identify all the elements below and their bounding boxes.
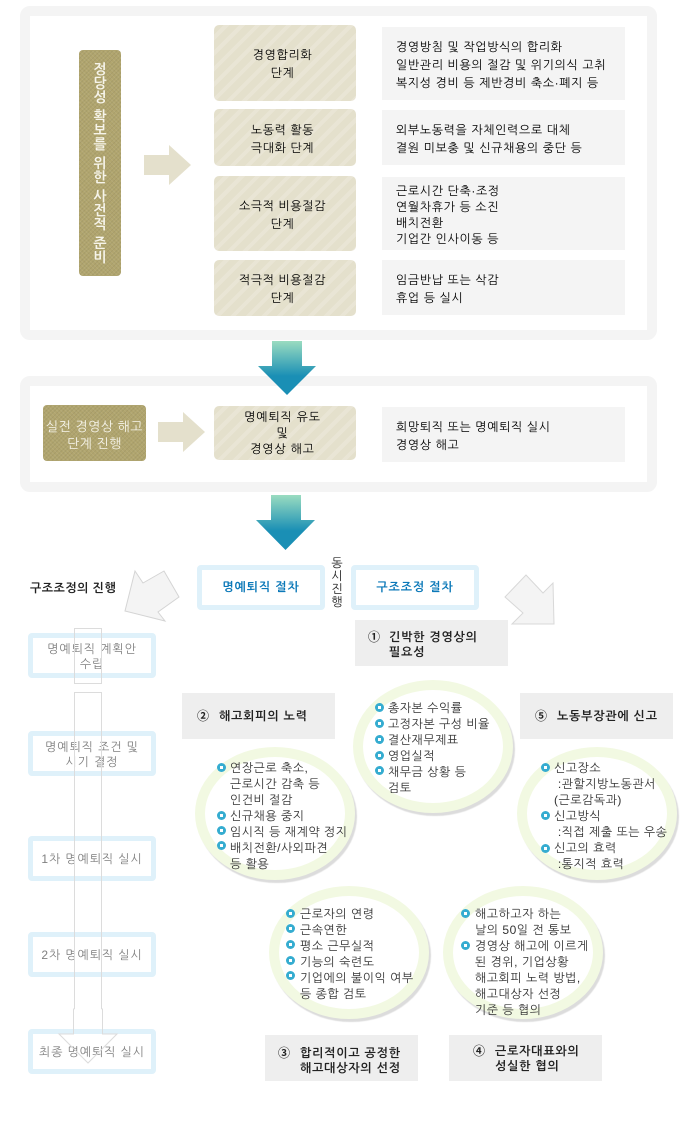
heading: restructuring progress: 구조조정의 진행 [30, 581, 116, 595]
ellipse: fair selection details: 기업에의 불이익 여부 [300, 971, 414, 985]
ellipse: dismissal avoidance details: 인건비 절감 [230, 793, 293, 807]
step: first round [28, 836, 156, 881]
ellipse: consultation details: 기준 등 협의 [475, 1003, 542, 1017]
vertical heading: preparation for justification [79, 50, 121, 276]
vertical heading: preparation for justification: 보 [93, 122, 107, 138]
ellipse: dismissal avoidance details [195, 747, 358, 884]
ellipse: fair selection details: 기능의 숙련도 [300, 955, 375, 969]
heading: report to labor minister [520, 693, 673, 739]
ellipse: dismissal avoidance details: 연장근로 축소, [230, 761, 308, 775]
step: conditions and timing [28, 731, 156, 776]
ellipse: consultation details: 해고대상자 선정 [475, 987, 561, 1001]
vertical heading: preparation for justification: 당 [93, 75, 107, 91]
ellipse: consultation details: 날의 50일 전 통보 [475, 923, 572, 937]
heading: restructuring procedure [351, 565, 479, 610]
heading: voluntary retirement procedure [197, 565, 325, 610]
step: management rationalization: 단계 [271, 66, 294, 80]
ellipse: fair selection details: 근속연한 [300, 923, 347, 937]
step: management rationalization [214, 25, 356, 101]
ellipse: dismissal avoidance details: 등 활용 [230, 857, 269, 871]
heading: effort to avoid dismissal: ② [197, 709, 210, 723]
heading: urgent managerial need: 긴박한 경영상의 [389, 630, 478, 644]
ellipse: consultation details: 해고회피 노력 방법, [475, 971, 581, 985]
step: active cost cutting [214, 260, 356, 316]
description: voluntary retirement and dismissal: 희망퇴직 또는 명예퇴직 실시 [396, 420, 551, 434]
description: management rationalization: 경영방침 및 작업방식의 합리화 [396, 40, 563, 54]
heading: report to labor minister: 노동부장관에 신고 [557, 709, 658, 723]
vertical heading: preparation for justification: 를 [93, 136, 107, 152]
ellipse: dismissal avoidance details: 배치전환/사외파견 [230, 841, 328, 855]
heading: effort to avoid dismissal [182, 693, 335, 739]
description: labor maximization: 결원 미보충 및 신규채용의 중단 등 [396, 140, 582, 154]
ellipse: urgent need details: 영업실적 [388, 749, 435, 763]
vertical heading: preparation for justification: 적 [93, 216, 107, 232]
arrow: gray to left [124, 570, 180, 622]
ellipse: urgent need details: 채무금 상황 등 [388, 765, 466, 779]
step: second round [28, 932, 156, 977]
vertical heading: preparation for justification: 성 [93, 89, 107, 105]
box: practical dismissal stage heading: 실전 경영상 해고 [46, 419, 143, 434]
vertical heading: preparation for justification: 확 [93, 108, 107, 124]
vertical heading: preparation for justification: 준 [93, 235, 107, 251]
vertical heading: preparation for justification: 정 [93, 61, 107, 77]
ellipse: urgent need details: 결산재무제표 [388, 733, 459, 747]
label: simultaneous progress: 행 [331, 595, 343, 609]
heading: effort to avoid dismissal: 해고회피의 노력 [219, 709, 308, 723]
description: passive cost cutting: 연월차휴가 등 소진 [396, 200, 499, 214]
description: active cost cutting: 휴업 등 실시 [396, 290, 463, 304]
description: labor maximization: 외부노동력을 자체인력으로 대체 [396, 122, 571, 136]
ellipse: report details [517, 747, 680, 884]
heading: consultation with representative [449, 1035, 602, 1081]
label: simultaneous progress: 동 [331, 556, 343, 570]
heading: consultation with representative: ④ [473, 1044, 486, 1058]
vertical heading: preparation for justification: 한 [93, 169, 107, 185]
step: voluntary retirement and dismissal: 명예퇴직 유도 [244, 410, 321, 424]
description: active cost cutting: 임금반납 또는 삭감 [396, 272, 499, 286]
heading: report to labor minister: ⑤ [535, 709, 548, 723]
label: simultaneous progress [331, 556, 343, 609]
heading: fair selection: ③ [278, 1046, 291, 1060]
ellipse: dismissal avoidance details: 신규채용 중지 [230, 809, 305, 823]
step: passive cost cutting [214, 176, 356, 251]
panel: preparation stage [20, 6, 657, 340]
description: management rationalization: 일반관리 비용의 절감 및 위기의식 고취 [396, 58, 606, 72]
heading: consultation with representative: 근로자대표와의 [495, 1044, 580, 1058]
step: retirement plan: 수립 [80, 656, 104, 670]
arrow: teal down 2 [256, 495, 315, 550]
ellipse: fair selection details: 근로자의 연령 [300, 907, 375, 921]
step: active cost cutting: 단계 [271, 291, 294, 305]
step: final round [28, 1029, 156, 1074]
ellipse: report details: :관할지방노동관서 [558, 777, 656, 791]
description: labor maximization [382, 110, 625, 165]
ellipse: report details: 신고장소 [554, 761, 601, 775]
description: passive cost cutting: 기업간 인사이동 등 [396, 232, 499, 246]
ellipse: urgent need details [353, 680, 516, 816]
description: active cost cutting [382, 260, 625, 315]
heading: urgent managerial need [355, 620, 508, 666]
vertical heading: preparation for justification: 비 [93, 249, 107, 265]
step: voluntary retirement and dismissal: 및 [276, 426, 289, 440]
description: passive cost cutting [382, 177, 625, 250]
ellipse: dismissal avoidance details: 근로시간 감축 등 [230, 777, 320, 791]
step: management rationalization: 경영합리화 [253, 48, 312, 62]
ellipse: urgent need details: 고정자본 구성 비율 [388, 717, 490, 731]
step: labor maximization: 극대화 단계 [251, 140, 314, 154]
heading: urgent managerial need: 필요성 [389, 645, 425, 659]
ellipse: report details: :직접 제출 또는 우송 [558, 825, 667, 839]
heading: fair selection [265, 1035, 418, 1081]
heading: consultation with representative: 성실한 협의 [495, 1059, 560, 1073]
arrow: gray to right [504, 574, 554, 624]
ellipse: report details: (근로감독과) [554, 793, 622, 807]
ellipse: report details: :통지적 효력 [558, 857, 624, 871]
ellipse: consultation details [443, 886, 606, 1022]
arrow: teal down 1 [258, 341, 316, 395]
vertical heading: preparation for justification: 사 [93, 188, 107, 204]
step: passive cost cutting: 소극적 비용절감 [239, 198, 326, 212]
heading: urgent managerial need: ① [368, 630, 381, 644]
arrow: preparation to steps [144, 145, 191, 185]
description: management rationalization: 복지성 경비 등 제반경비 축소·폐지 등 [396, 76, 599, 90]
ellipse: consultation details: 된 경위, 기업상황 [475, 955, 569, 969]
ellipse: report details: 신고의 효력 [554, 841, 617, 855]
step: labor maximization: 노동력 활동 [251, 122, 314, 136]
description: passive cost cutting: 배치전환 [396, 216, 444, 230]
ellipse: urgent need details: 총자본 수익률 [388, 701, 463, 715]
arrow: practical stage to step [158, 412, 205, 452]
heading: voluntary retirement procedure: 명예퇴직 절차 [222, 580, 300, 594]
step: retirement plan [28, 633, 156, 678]
label: simultaneous progress: 진 [331, 582, 343, 596]
arrow: faint outline down the steps [58, 628, 118, 1064]
ellipse: urgent need details: 검토 [388, 781, 412, 795]
description: passive cost cutting: 근로시간 단축·조정 [396, 184, 500, 198]
ellipse: fair selection details: 등 종합 검토 [300, 987, 367, 1001]
vertical heading: preparation for justification: 전 [93, 202, 107, 218]
heading: fair selection: 합리적이고 공정한 [300, 1046, 401, 1060]
step: passive cost cutting: 단계 [271, 216, 294, 230]
box: practical dismissal stage heading [43, 405, 146, 461]
step: conditions and timing: 시기 결정 [66, 754, 118, 768]
ellipse: fair selection details: 평소 근무실적 [300, 939, 375, 953]
ellipse: dismissal avoidance details: 임시직 등 재계약 정지 [230, 825, 348, 839]
ellipse: consultation details: 해고하고자 하는 [475, 907, 561, 921]
step: voluntary retirement and dismissal [214, 406, 356, 460]
label: simultaneous progress: 시 [331, 569, 343, 583]
step: retirement plan: 명예퇴직 계획안 [47, 642, 137, 656]
ellipse: consultation details: 경영상 해고에 이르게 [475, 939, 589, 953]
step: active cost cutting: 적극적 비용절감 [239, 273, 326, 287]
description: voluntary retirement and dismissal [382, 407, 625, 462]
step: conditions and timing: 명예퇴직 조건 및 [45, 740, 139, 754]
vertical heading: preparation for justification: 위 [93, 155, 107, 171]
description: management rationalization [382, 27, 625, 100]
box: practical dismissal stage heading: 단계 진행 [67, 436, 122, 451]
description: voluntary retirement and dismissal: 경영상 해고 [396, 438, 459, 452]
ellipse: report details: 신고방식 [554, 809, 601, 823]
heading: fair selection: 해고대상자의 선정 [300, 1061, 401, 1075]
ellipse: fair selection details [269, 886, 432, 1022]
step: final round: 최종 명예퇴직 실시 [39, 1045, 145, 1059]
heading: restructuring procedure: 구조조정 절차 [376, 580, 454, 594]
panel: practical dismissal stage [20, 376, 657, 492]
step: labor maximization [214, 109, 356, 166]
step: first round: 1차 명예퇴직 실시 [41, 852, 143, 866]
step: voluntary retirement and dismissal: 경영상 해고 [250, 442, 315, 456]
step: second round: 2차 명예퇴직 실시 [41, 948, 143, 962]
